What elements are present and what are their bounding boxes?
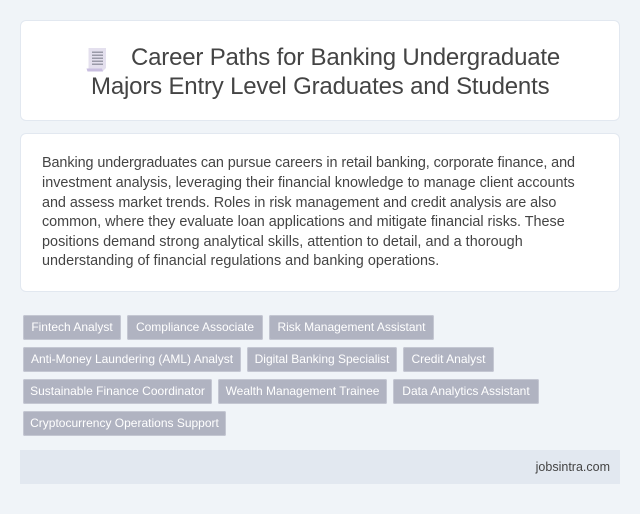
tags: [23, 315, 539, 436]
footer: jobsintra.com: [536, 460, 610, 474]
tags: Cryptocurrency Operations Support: [30, 416, 219, 430]
tags: Fintech Analyst: [31, 320, 113, 334]
title: Majors Entry Level Graduates and Students: [91, 73, 549, 100]
tags: Credit Analyst: [411, 352, 486, 366]
description text: and assess market trends. Roles in risk management and credit analysis are also: [42, 195, 556, 211]
tags: Compliance Associate: [136, 320, 254, 334]
icon: document scroll: [86, 48, 106, 72]
tags: Sustainable Finance Coordinator: [30, 384, 205, 398]
description text: investment analysis, leveraging their financial knowledge to manage client accounts: [42, 175, 575, 191]
description text: positions demand strong analytical skills, attention to detail, and a thorough: [42, 234, 523, 250]
tags: Anti-Money Laundering (AML) Analyst: [31, 352, 233, 366]
description text: common, where they evaluate loan applications and mitigate financial risks. These: [42, 214, 565, 230]
panel: description: [20, 133, 620, 292]
tags: Risk Management Assistant: [277, 320, 426, 334]
footer: [20, 450, 620, 484]
tags: Data Analytics Assistant: [402, 384, 530, 398]
description text: Banking undergraduates can pursue careers in retail banking, corporate finance, and: [42, 155, 575, 171]
tags: Digital Banking Specialist: [255, 352, 389, 366]
header panel: [20, 20, 620, 121]
description text: [42, 155, 575, 269]
title: Career Paths for Banking Undergraduate: [131, 44, 560, 71]
description text: understanding of financial regulations and banking operations.: [42, 253, 439, 269]
tags: Wealth Management Trainee: [226, 384, 379, 398]
title: [91, 44, 560, 100]
